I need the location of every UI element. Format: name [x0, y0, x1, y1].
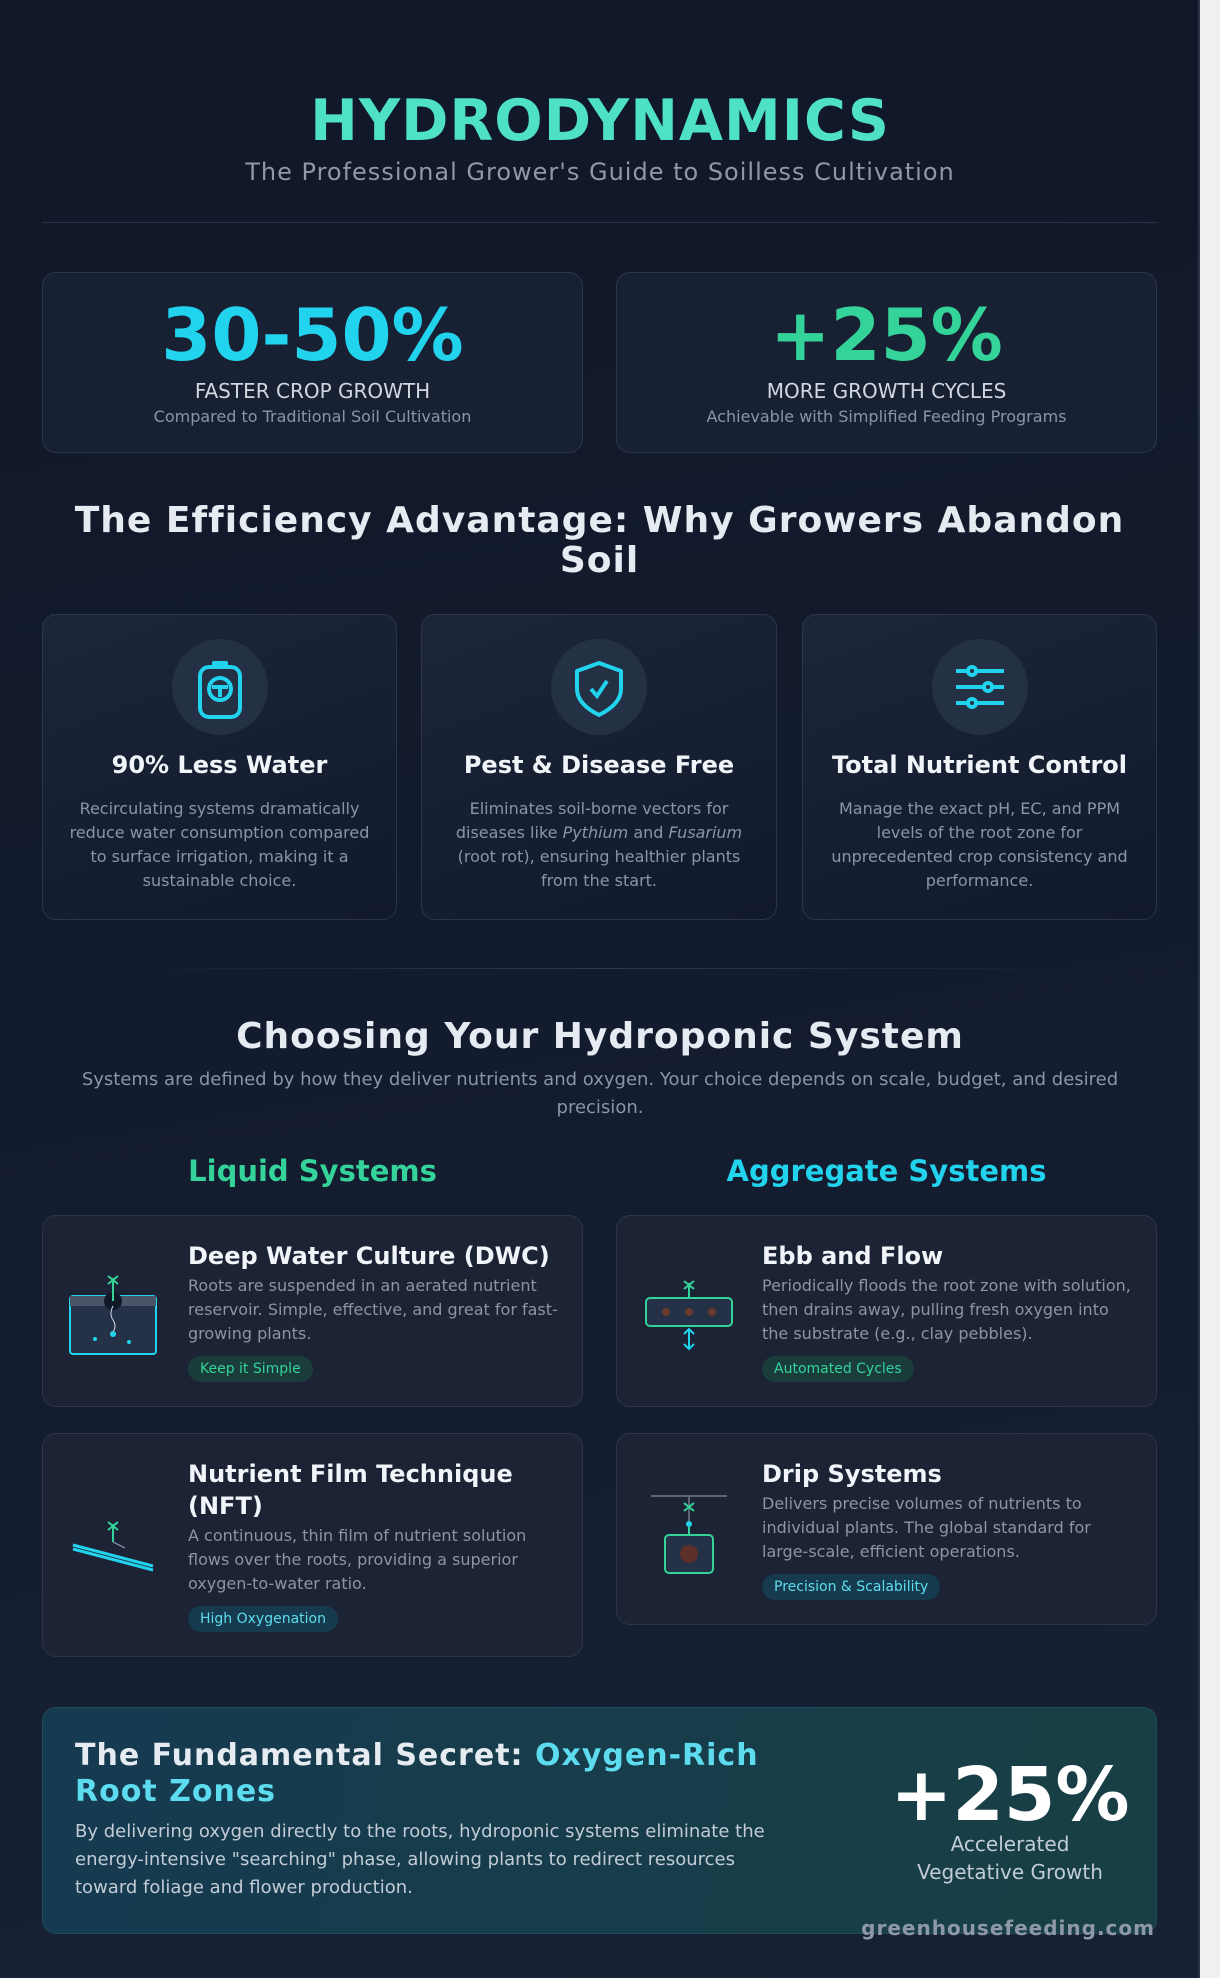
stat card: growth cycles: Achievable with Simplified Feeding Programs — [707, 407, 1066, 426]
callout: oxygen-rich root zones: Accelerated — [951, 1832, 1069, 1856]
feature card: pest: Pest & Disease Free — [464, 751, 734, 779]
icon: flood tray — [645, 1280, 733, 1350]
stat card: faster growth — [42, 272, 583, 453]
feature card: water — [42, 614, 397, 920]
section heading: choosing: Choosing Your Hydroponic System — [236, 1016, 964, 1057]
feature card: nutrient control — [802, 614, 1157, 920]
system card: DWC: Keep it Simple — [200, 1361, 301, 1377]
stat card: growth cycles: MORE GROWTH CYCLES — [767, 379, 1006, 403]
stat card: faster growth: FASTER CROP GROWTH — [195, 379, 430, 403]
system card: drip: Drip Systems — [762, 1460, 942, 1488]
feature card: pest — [421, 614, 777, 920]
system card: NFT — [42, 1433, 583, 1657]
system card: DWC — [42, 1215, 583, 1407]
system card: ebb and flow: Automated Cycles — [774, 1361, 902, 1377]
callout text: By delivering oxygen directly to the roots, hydroponic systems eliminate the energy-intensive "searching" phase, allowing plants to redirect resources toward foliage and flower production. — [75, 1821, 765, 1898]
footer: website: greenhousefeeding.com — [861, 1916, 1155, 1940]
system card: NFT: A continuous, thin film of nutrient solution flows over the roots, providing a superior oxygen-to-water ratio. — [188, 1526, 526, 1593]
system card: DWC: Deep Water Culture (DWC) — [188, 1242, 550, 1270]
callout: oxygen-rich root zones: Vegetative Growth — [917, 1860, 1103, 1884]
feature card: nutrient control: Manage the exact pH, EC, and PPM levels of the root zone for unprecedented crop consistency and performance. — [831, 799, 1128, 890]
system card: drip: Precision & Scalability — [774, 1579, 928, 1595]
system card: NFT: Nutrient Film Technique (NFT) — [188, 1460, 513, 1520]
stat card: faster growth: Compared to Traditional Soil Cultivation — [154, 407, 471, 426]
system card: drip — [616, 1433, 1157, 1625]
callout heading: The Fundamental Secret: Oxygen-Rich Root Zones — [75, 1738, 759, 1809]
system card: NFT: High Oxygenation — [200, 1611, 326, 1627]
feature card: water: 90% Less Water — [112, 751, 327, 779]
title: HYDRODYNAMICS — [310, 88, 890, 154]
system card: DWC: Roots are suspended in an aerated nutrient reservoir. Simple, effective, and great for fast-growing plants. — [188, 1276, 558, 1343]
icon: water jug — [172, 639, 268, 735]
callout: oxygen-rich root zones — [42, 1707, 1157, 1934]
subtitle: The Professional Grower's Guide to Soilless Cultivation — [245, 158, 955, 186]
icon: DWC tank — [69, 1275, 157, 1355]
feature card: water: Recirculating systems dramatically reduce water consumption compared to surface irrigation, making it a sustainable choice. — [70, 799, 369, 890]
stat card: growth cycles — [616, 272, 1157, 453]
stat card: growth cycles: +25% — [770, 293, 1003, 377]
feature card: nutrient control: Total Nutrient Control — [832, 751, 1127, 779]
system card: ebb and flow: Ebb and Flow — [762, 1242, 943, 1270]
column heading: aggregate: Aggregate Systems — [727, 1154, 1046, 1188]
feature card: pest: Eliminates soil-borne vectors for diseases like Pythium and Fusarium (root rot), ensuring healthier plants from the start. — [456, 799, 742, 890]
stat card: faster growth: 30-50% — [161, 293, 464, 377]
icon: shield — [551, 639, 647, 735]
section description: Systems are defined by how they deliver nutrients and oxygen. Your choice depends on scale, budget, and desired precision. — [82, 1069, 1118, 1118]
icon: NFT channel — [72, 1521, 154, 1572]
icon: sliders — [932, 639, 1028, 735]
section heading: efficiency: The Efficiency Advantage: Why Growers Abandon Soil — [75, 500, 1124, 581]
icon: drip emitter — [651, 1495, 727, 1574]
system card: ebb and flow: Periodically floods the root zone with solution, then drains away, pulling fresh oxygen into the substrate (e.g., clay pebbles). — [762, 1276, 1131, 1343]
column heading: liquid: Liquid Systems — [188, 1154, 437, 1188]
callout stat: +25% — [890, 1752, 1130, 1838]
system card: ebb and flow — [616, 1215, 1157, 1407]
system card: drip: Delivers precise volumes of nutrients to individual plants. The global standard for large-scale, efficient operations. — [762, 1494, 1091, 1561]
